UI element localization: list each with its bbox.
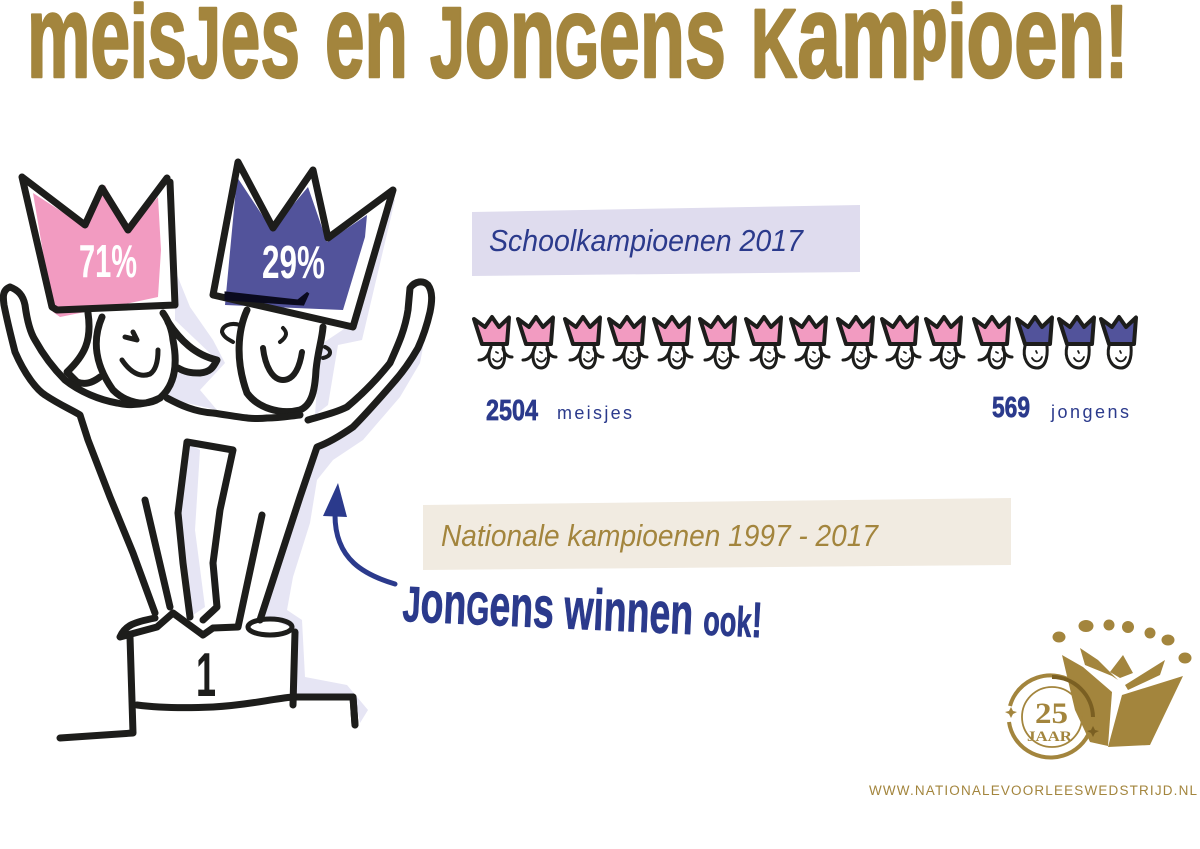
stat: boys: 569 <box>992 392 1030 424</box>
logo: 25 jaar book: 25 <box>1035 697 1068 730</box>
boy crown percentage: 29% <box>262 236 325 288</box>
girl head and hair <box>67 313 217 403</box>
boy head <box>222 310 330 412</box>
panel: Nationale kampioenen <box>423 498 1011 570</box>
body and arms <box>3 282 432 637</box>
logo: 25 jaar book <box>1005 620 1192 757</box>
panel: Schoolkampioenen 2017 <box>472 205 860 276</box>
girl crown <box>22 177 175 317</box>
arrow <box>323 483 395 584</box>
lavender shadow <box>165 195 432 723</box>
podium number: 1 <box>196 641 216 710</box>
girl crown percentage: 71% <box>79 235 137 287</box>
panel: Nationale kampioenen: Nationale kampioenen 1997 - 2017 <box>441 518 880 553</box>
callout: Jongens winnen ook: JonGens winnen ook! <box>401 569 764 650</box>
stat: girls: meisjes <box>557 403 632 423</box>
logo: 25 jaar book: JAAR <box>1027 729 1072 745</box>
title <box>27 0 1128 103</box>
stat: boys <box>992 392 1129 424</box>
boy crown <box>213 162 393 327</box>
illustration: two champions on podium <box>3 162 432 738</box>
stat: boys: jongens <box>1050 402 1129 422</box>
podium <box>60 632 355 738</box>
website url: WWW.NATIONALEVOORLEESWEDSTRIJD.NL <box>869 783 1197 798</box>
pictogram row: 12 girls and 3 boys <box>474 317 1136 368</box>
stat: girls: 2504 <box>486 395 538 427</box>
stat: girls <box>486 395 632 427</box>
panel: Schoolkampioenen 2017: Schoolkampioenen 2017 <box>489 223 805 258</box>
